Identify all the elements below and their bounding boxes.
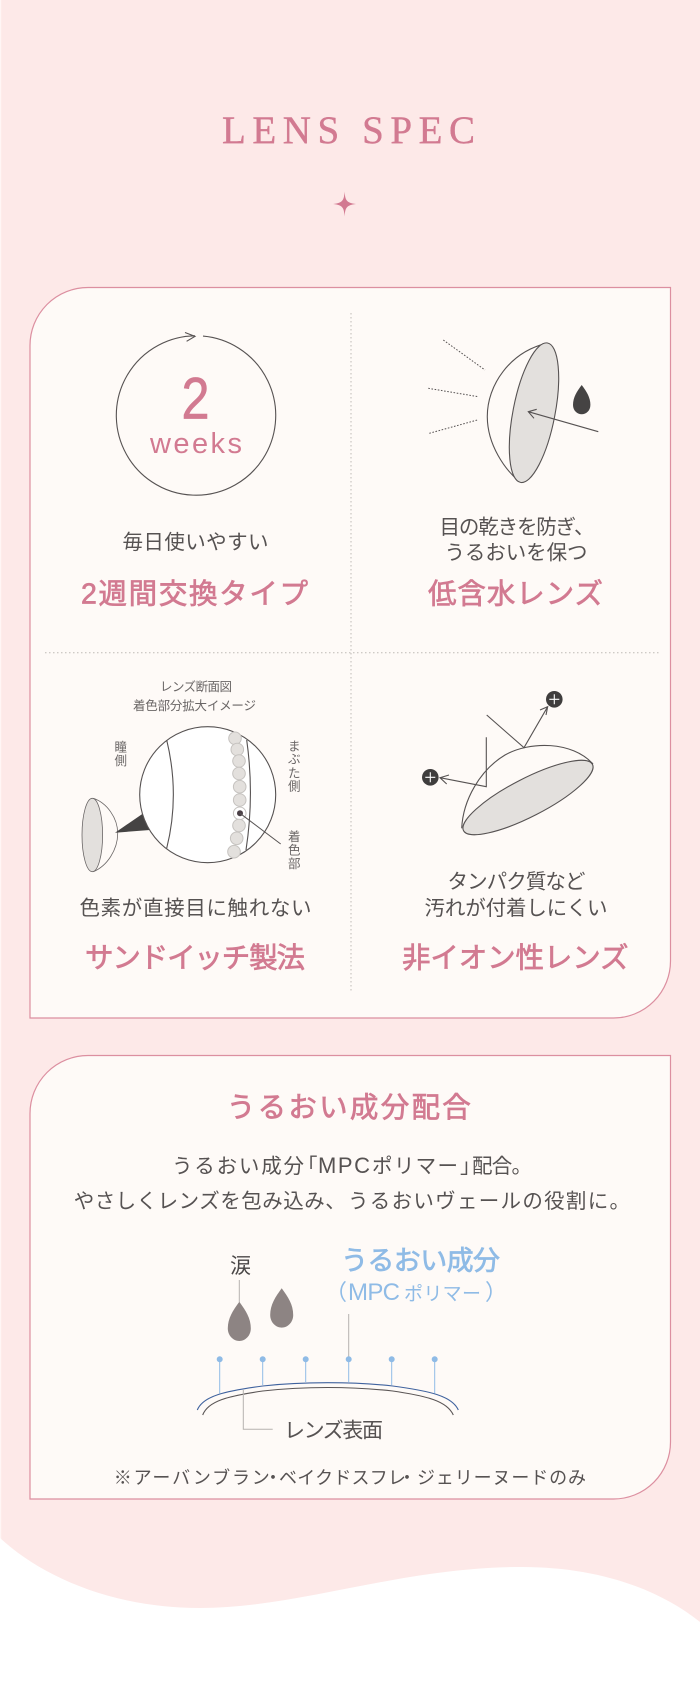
polymer pins [217,1357,437,1393]
lens surface curves [197,1383,458,1415]
icon: lens cross-section: 着色部分拡大イメージ [133,698,256,713]
panel heading: うるおい成分配合 [227,1092,471,1124]
panel: moisturising ingredient [30,1056,670,1499]
icon: lens cross-section: ぶ [288,752,301,766]
footnote: ベイクドスフレ [279,1468,406,1488]
icon: lens cross-section: 側 [114,754,127,768]
cell: 2 weeks [81,332,308,610]
label: lens surface: レンズ表面 [284,1420,383,1442]
label: moisture ingredient: うるおい成分 [341,1246,500,1276]
icon: tear drops [228,1288,293,1341]
title: LENS SPEC [222,109,475,152]
body text: ポリマー [372,1155,458,1178]
icon: lens cross-section: 瞳 [114,740,127,754]
icon: lens cross-section: 着 [288,829,301,844]
icon: lens cross-section: 部 [288,857,301,871]
body text: MPC [318,1153,370,1178]
icon: 2 weeks cycle circle: 2 [182,366,210,432]
icon: lens cross-section [82,679,301,872]
label: moisture ingredient [325,1246,507,1306]
feature heading: 2週間交換タイプ [81,578,308,610]
body text: うるおいヴェールの役割に。 [348,1190,630,1213]
icon: lens with water drop [428,339,598,486]
feature heading: サンドイッチ製法 [85,942,305,974]
icon: lens with repelled charges [422,691,601,848]
label: moisture ingredient: ポリマー [404,1283,481,1305]
label: tears: 涙 [230,1255,251,1278]
body text [74,1153,630,1213]
body text: うるおい成分 [172,1155,304,1178]
footnote [114,1467,586,1488]
cell: low water content [428,339,603,610]
label: moisture ingredient: ） [485,1280,507,1305]
diagram: lens surface with MPC polymer [197,1246,507,1442]
footnote: ジェリーヌードのみ [417,1468,586,1488]
description: 毎日使いやすい [122,531,268,554]
footnote: ※アーバンブラン [114,1467,270,1488]
icon: lens cross-section: ま [288,740,301,754]
body text: 「 [297,1155,318,1178]
icon: lens cross-section: 側 [288,780,301,794]
cell: non-ionic lens [402,691,629,974]
body text: やさしくレンズを包み込み、 [74,1190,346,1213]
icon: 2 weeks cycle circle: weeks [149,428,242,460]
label: moisture ingredient: MPC [348,1279,400,1306]
panel: lens features [30,288,670,1018]
label: moisture ingredient: （ [325,1280,347,1305]
icon: 2 weeks cycle circle [116,332,276,495]
icon: lens cross-section: た [288,766,301,780]
description [424,870,608,920]
body text: 」 [460,1155,480,1178]
cell: sandwich method [80,679,312,974]
footnote: ・ [264,1468,282,1488]
body text: 配合。 [472,1155,532,1178]
feature heading: 低含水レンズ [428,578,603,610]
footnote: ・ [398,1468,416,1488]
description: 色素が直接目に触れない [80,897,312,920]
icon: sparkle star [333,192,356,216]
icon: lens cross-section: レンズ断面図 [160,679,232,694]
description: タンパク質など [448,870,586,894]
description: 目の乾きを防ぎ、 [440,516,594,539]
description: 汚れが付着しにくい [424,897,608,920]
feature heading: 非イオン性レンズ [402,942,629,974]
description: うるおいを保つ [444,542,588,564]
bottom white wave [0,1538,700,1682]
description [440,516,594,564]
icon: lens cross-section: 色 [288,844,301,858]
